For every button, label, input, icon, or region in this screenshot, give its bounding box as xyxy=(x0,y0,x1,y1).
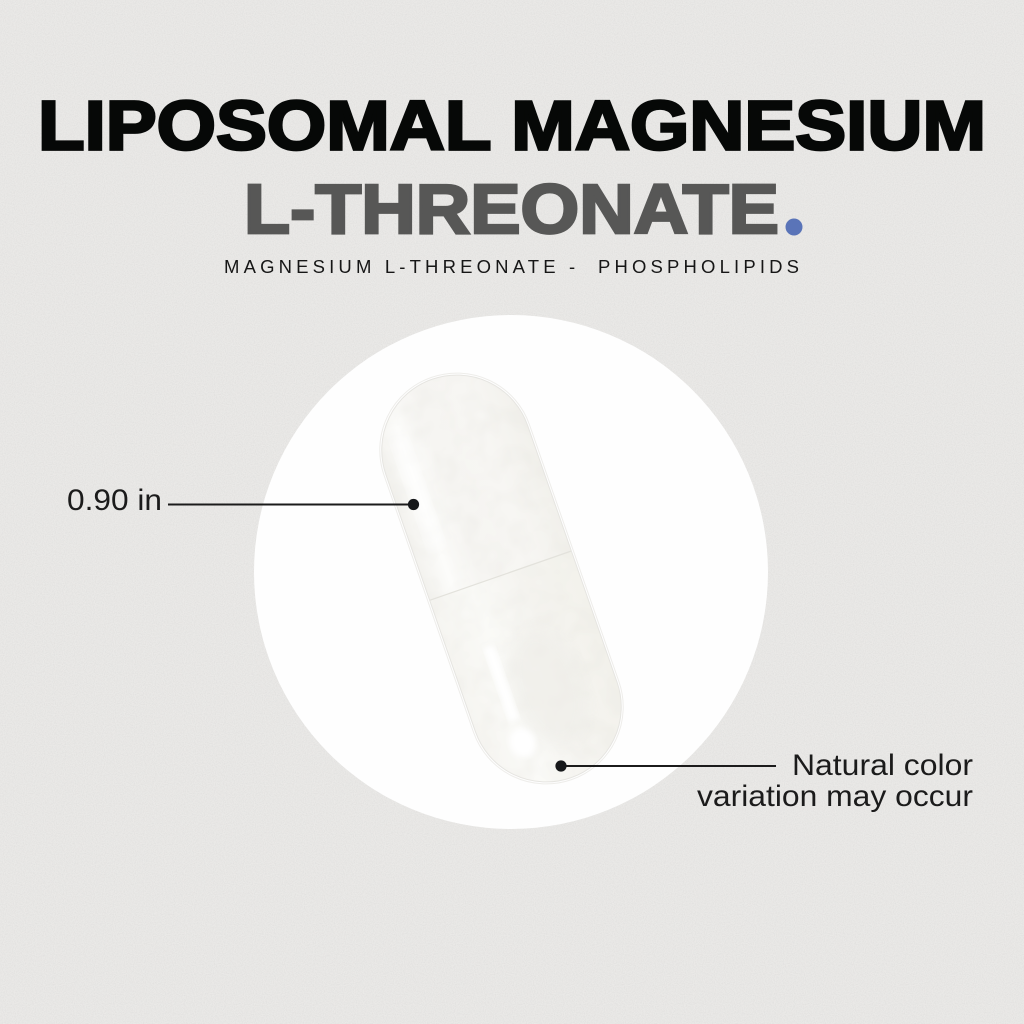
label: capsule size: 0.90 in xyxy=(67,484,162,517)
leader line: color variation xyxy=(555,760,776,772)
label: color variation note xyxy=(697,749,973,813)
title: line 2: L-THREONATE xyxy=(244,170,779,248)
white circle panel xyxy=(254,315,768,829)
icon: capsule xyxy=(379,372,624,784)
label: color variation note: Natural color xyxy=(792,749,973,782)
title accent dot xyxy=(786,218,802,236)
title: line 1: LIPOSOMAL MAGNESIUM xyxy=(38,86,986,164)
leader line: capsule size xyxy=(168,499,419,510)
subtitle: MAGNESIUM L-THREONATE - PHOSPHOLIPIDS xyxy=(224,256,799,277)
label: color variation note: variation may occur xyxy=(697,780,973,813)
